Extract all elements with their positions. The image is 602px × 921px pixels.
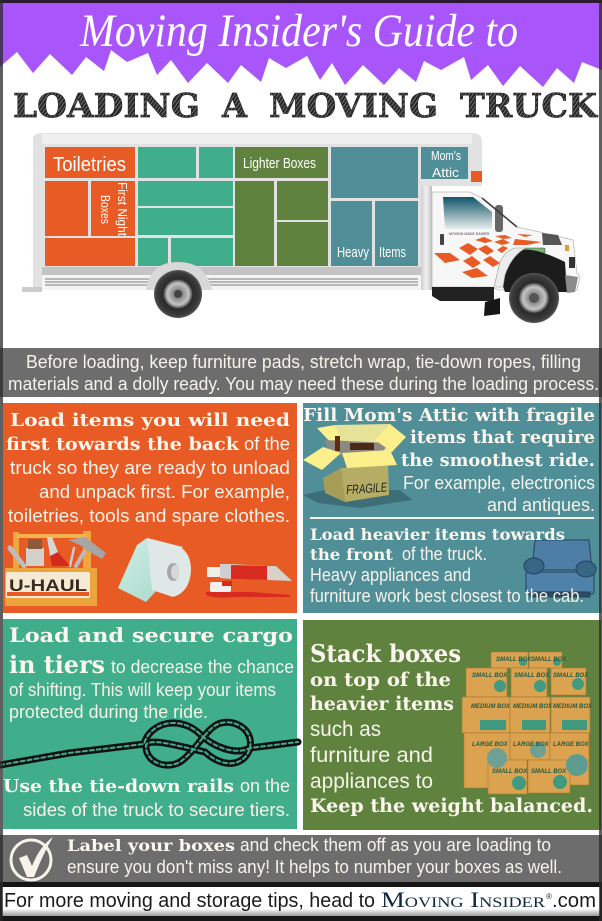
panel: stack boxes: Stack boxes <box>310 639 461 668</box>
main heading: A <box>221 86 247 125</box>
label band <box>0 834 602 882</box>
icon: stack of boxes: MEDIUM BOX <box>471 704 511 710</box>
icon: toilet paper <box>118 538 191 602</box>
label band: and check them off as you are loading to <box>240 834 551 855</box>
panel: mom's attic: items that require <box>410 427 595 448</box>
truck cab <box>421 186 580 316</box>
panel: tiers: on the <box>240 775 290 796</box>
icon: fragile box: FRAGILE <box>346 479 388 497</box>
cargo: heavy items zone <box>331 147 468 266</box>
intro band: Before loading, keep furniture pads, stretch wrap, tie-down ropes, filling <box>26 351 581 372</box>
fender and wheel arch <box>500 250 567 292</box>
footer: .com <box>552 890 596 912</box>
icon: toothbrush <box>206 581 290 598</box>
footer <box>0 882 602 921</box>
panel: tiers: Load and secure cargo <box>9 623 293 647</box>
icon: toolbox <box>5 531 106 606</box>
icon: armchair <box>524 540 596 597</box>
icon: stack of boxes: MEDIUM BOX <box>553 704 593 710</box>
panel: mom's attic: Heavy appliances and <box>310 564 471 585</box>
icon: stack of boxes: SMALL BOX <box>553 673 589 679</box>
footer: For more moving and storage tips, head to <box>4 890 375 912</box>
panel: tiers: protected during the ride. <box>9 701 208 722</box>
panel: tiers: to decrease the chance <box>111 656 294 677</box>
icon: stack of boxes: LARGE BOX <box>513 742 550 748</box>
footer: ® <box>546 892 552 901</box>
main heading: TRUCK <box>460 86 598 125</box>
main heading: MOVING <box>269 86 438 125</box>
panel: stack boxes: Keep the weight balanced. <box>310 795 593 817</box>
panel: stack boxes <box>303 620 601 830</box>
panel: load first: truck so they are ready to unload <box>10 457 290 478</box>
panel: tiers: of shifting. This will keep your items <box>9 679 276 700</box>
icon: stack of boxes: SMALL BOX <box>496 657 532 663</box>
footer: Moving Insider <box>381 887 545 912</box>
label band: Label your boxes <box>67 836 235 855</box>
icon: fragile box <box>303 424 412 508</box>
panel: stack boxes: appliances to <box>310 770 433 793</box>
main heading: LOADING <box>13 86 200 125</box>
cargo: heavy items zone: Attic <box>432 165 460 180</box>
header banner <box>0 0 602 87</box>
panel: stack boxes: furniture and <box>310 744 433 767</box>
icon: stack of boxes: SMALL BOX <box>472 673 508 679</box>
label band: ensure you don't miss any! It helps to number your boxes as well. <box>67 856 562 877</box>
icon: stack of boxes <box>462 652 593 794</box>
panel: stack boxes: heavier items <box>310 693 454 715</box>
icon: stack of boxes: SMALL BOX <box>514 673 550 679</box>
panel: tiers: sides of the truck to secure tiers. <box>23 799 290 820</box>
panel: load first: of the <box>244 433 290 454</box>
truck illustration <box>22 133 580 323</box>
cargo: lighter boxes zone: Lighter Boxes <box>243 156 316 172</box>
panel: mom's attic: Fill Mom's Attic with fragile <box>303 405 595 426</box>
rear wheel <box>146 262 212 318</box>
cargo: teal zone <box>138 147 233 266</box>
cargo: toiletries zone: First Night <box>115 182 130 236</box>
icon: stack of boxes: LARGE BOX <box>553 742 590 748</box>
truck body <box>22 133 482 292</box>
panel: load first: first towards the back <box>6 434 240 455</box>
icon: checkmark <box>11 837 53 880</box>
panel: mom's attic: Load heavier items towards <box>310 525 565 544</box>
icon: toothpaste <box>207 564 292 581</box>
icon: stack of boxes: SMALL BOX <box>531 769 567 775</box>
panel: mom's attic: the smoothest ride. <box>401 450 595 471</box>
truck cab: MOVING MADE EASIER <box>449 232 489 236</box>
panel: load first: toiletries, tools and spare clothes. <box>8 505 290 526</box>
panel: stack boxes: on top of the <box>310 669 451 691</box>
panel: load first: and unpack first. For example, <box>39 481 290 502</box>
panel: mom's attic <box>303 403 601 613</box>
icon: stack of boxes: MEDIUM BOX <box>513 704 553 710</box>
main heading <box>13 86 598 125</box>
cargo: toiletries zone <box>45 147 135 266</box>
icon: stack of boxes: LARGE BOX <box>472 742 509 748</box>
cargo: heavy items zone: Heavy <box>337 244 369 261</box>
panel: load first <box>3 403 297 613</box>
cargo: heavy items zone: Items <box>379 244 406 261</box>
icon: toolbox: U-HAUL <box>9 576 87 595</box>
panel: tiers: Use the tie-down rails <box>3 776 234 797</box>
panel: tiers: in tiers <box>9 650 105 679</box>
panel: stack boxes: such as <box>310 718 381 741</box>
panel: tiers <box>0 619 298 829</box>
icon: stack of boxes: SMALL BOX <box>492 769 528 775</box>
intro band <box>0 348 602 397</box>
cargo: heavy items zone: Mom's <box>431 148 461 163</box>
panel: mom's attic: the front <box>310 545 394 564</box>
panel: mom's attic: of the truck. <box>402 543 487 564</box>
panel: load first: Load items you will need <box>10 410 290 431</box>
cargo: toiletries zone: Boxes <box>98 195 113 224</box>
title script: Moving Insider's Guide to <box>79 5 518 57</box>
icon: rope knot <box>0 722 298 765</box>
panel: mom's attic: For example, electronics <box>403 472 595 493</box>
icon: stack of boxes: SMALL BOX <box>531 657 567 663</box>
front wheel <box>509 273 559 323</box>
panel: mom's attic: and antiques. <box>487 494 595 515</box>
cargo: lighter boxes zone <box>235 147 328 266</box>
cargo: toiletries zone: Toiletries <box>53 154 126 176</box>
